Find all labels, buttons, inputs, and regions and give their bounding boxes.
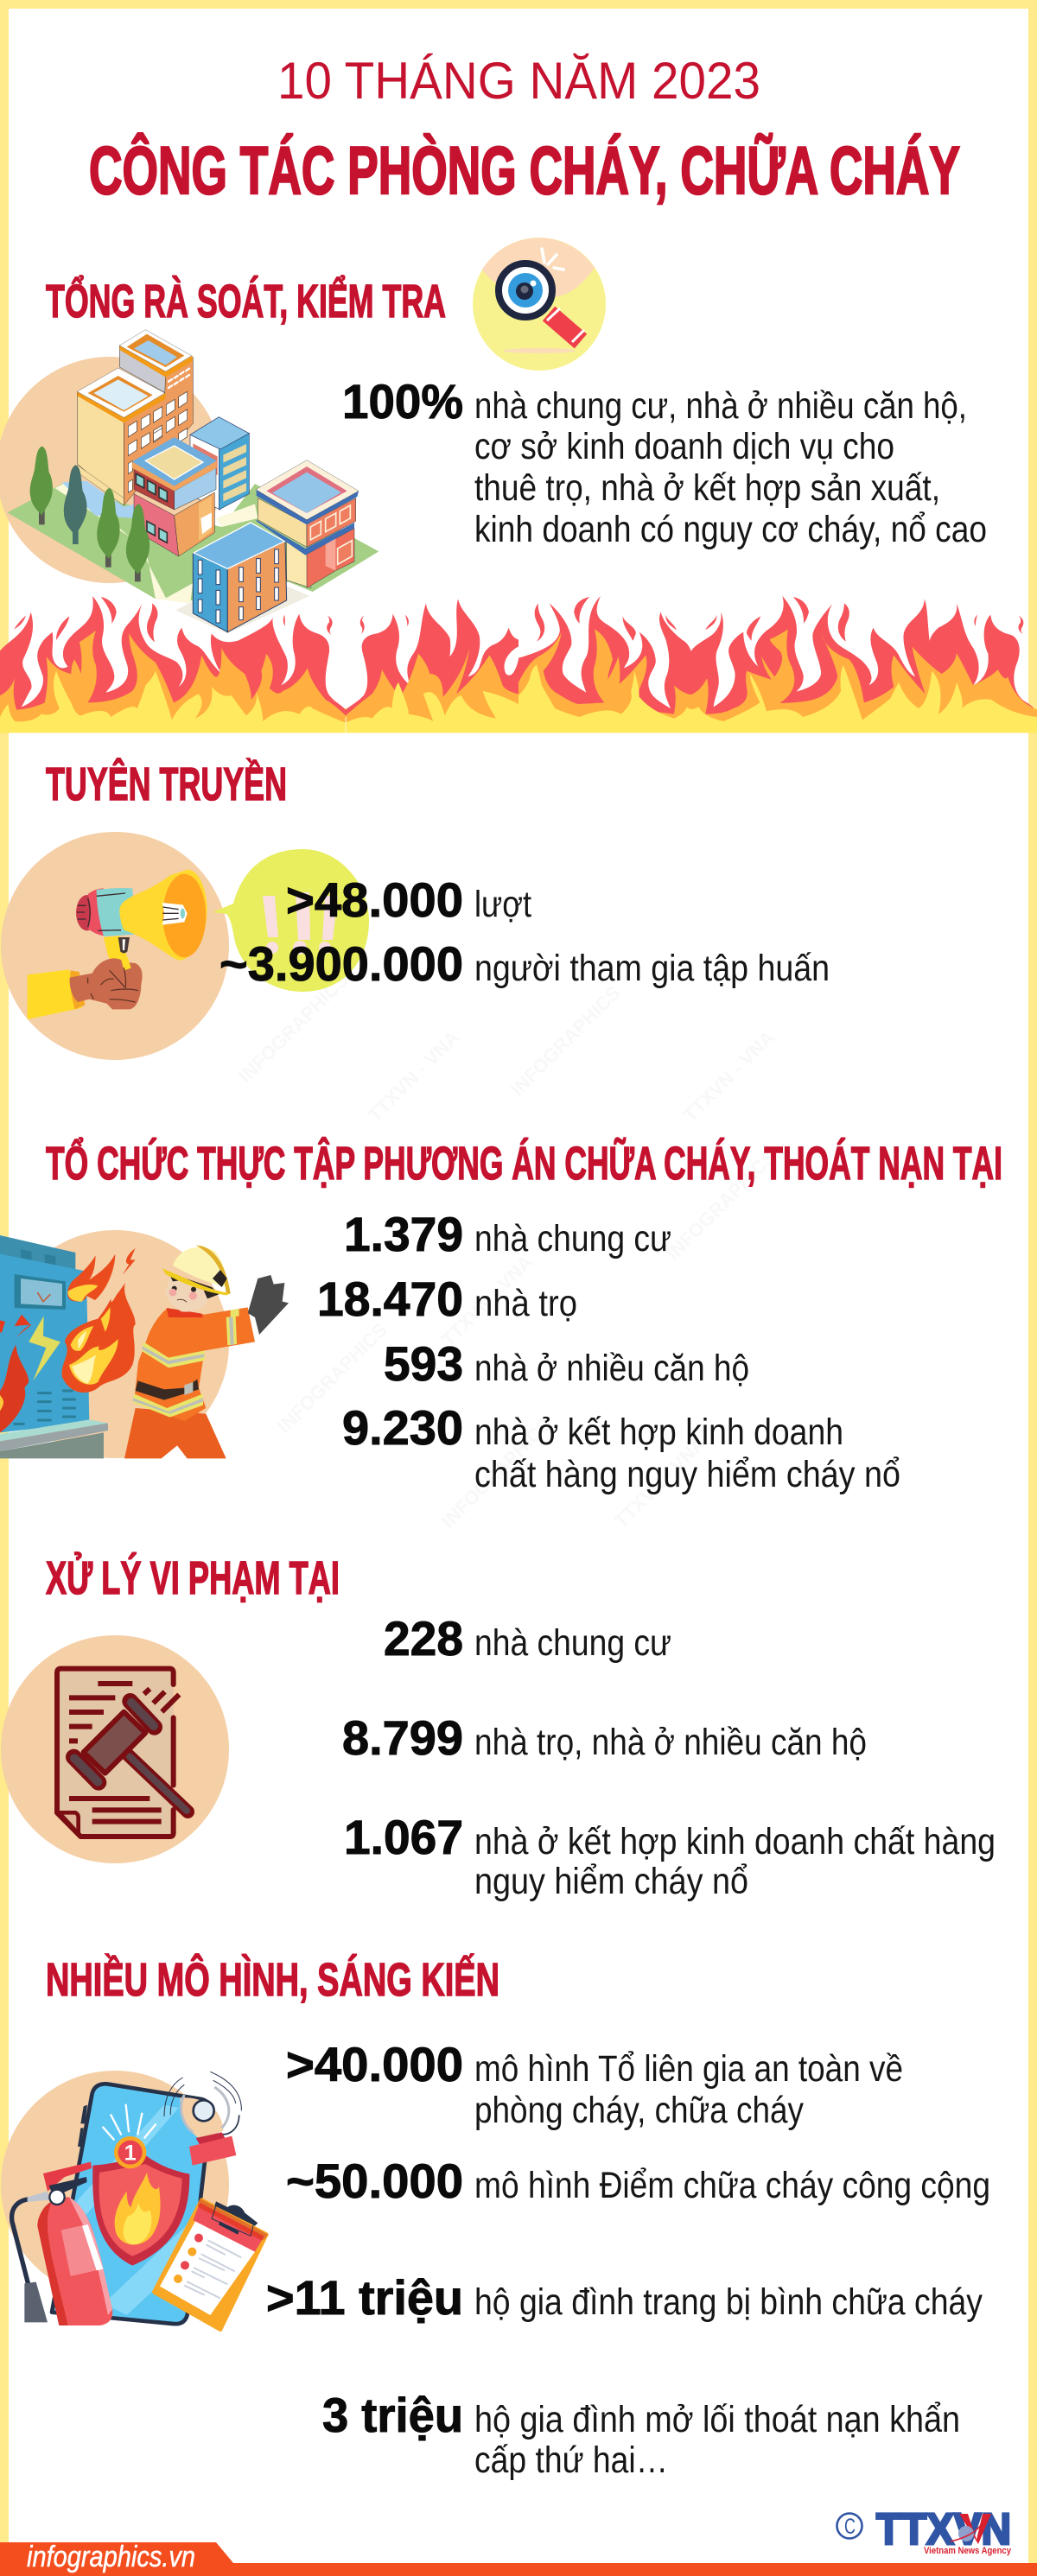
label: nhà chung cư [474,1218,671,1259]
number: >48.000 [286,872,463,927]
label: mô hình Tổ liên gia an toàn về [474,2048,903,2090]
text: INFOGRAPHICS [506,982,625,1101]
number: 1.379 [344,1207,463,1261]
text: INFOGRAPHICS [273,1319,391,1437]
stat: 100% [342,374,987,550]
description: nhà chung cư, nhà ở nhiều căn hộ, [474,385,967,427]
label: hộ gia đình mở lối thoát nạn khẩn [474,2399,960,2440]
clipboard [154,2200,266,2330]
title line 1: 10 THÁNG NĂM 2023 [277,52,760,110]
number: 8.799 [342,1710,463,1765]
stat: 11 triệu [266,2270,983,2325]
front building [193,553,227,632]
text: INFOGRAPHICS [234,969,353,1088]
stat: 18.470 [317,1272,577,1326]
stat: 3 triệu [322,2388,960,2481]
label [474,1412,900,1495]
TTXVN logo [837,2504,1012,2556]
label: chất hàng nguy hiểm cháy nổ [474,1454,900,1495]
label [474,2399,960,2481]
section heading: xử lý vi phạm tại: XỬ LÝ VI PHẠM TẠI [46,1552,340,1604]
description: cơ sở kinh doanh dịch vụ cho [474,426,894,467]
extinguisher [12,2199,30,2287]
alarm [164,2072,241,2135]
icon: megaphone [1,832,369,1060]
speech bubble [213,849,369,992]
trees [39,510,45,524]
description: thuê trọ, nhà ở kết hợp sản xuất, [474,467,940,509]
text: TTXVN - VNA [437,1251,537,1351]
tall building [119,346,166,393]
illustration: firefighter [0,1230,289,1458]
text: TTXVN - VNA [679,1026,779,1126]
label: nhà trọ, nhà ở nhiều căn hộ [474,1722,867,1763]
title [89,52,960,208]
illustration: phone, extinguisher and checklist [1,2071,268,2330]
label: người tham gia tập huấn [474,948,830,989]
badge: 1 [124,2141,137,2166]
stat: 50.000 [286,2154,990,2208]
wordmark: TTXVN [876,2504,1011,2554]
text: TTXVN - VNA [610,1432,709,1532]
number: 593 [384,1336,463,1391]
label: nguy hiểm cháy nổ [474,1861,748,1902]
label: lượt [474,884,531,925]
illustration: isometric buildings [0,330,379,633]
section heading: tuyên truyền: TUYÊN TRUYỀN [46,758,287,810]
flames left half [0,596,518,733]
stat: 9.230 [342,1400,900,1495]
section heading: tổng rà soát, kiểm tra: TỔNG RÀ SOÁT, KIỂM TRA [46,276,446,327]
flames right half [518,596,1037,733]
copyright mark [837,2514,862,2539]
number: 100% [342,374,463,428]
stat: 593 [384,1336,749,1391]
section heading: nhiều mô hình, sáng kiến: NHIỀU MÔ HÌNH, SÁNG KIẾN [46,1953,499,2006]
right building [287,542,311,588]
text: TTXVN - VNA [364,1026,463,1126]
number: ~50.000 [286,2154,463,2208]
description [474,385,987,550]
number: >11 triệu [266,2270,463,2325]
text: INFOGRAPHICS [437,1414,556,1532]
number: ~3.900.000 [219,936,463,991]
copyright mark: C [844,2515,856,2539]
stat: 228 [384,1611,671,1666]
stat: 8.799 [342,1710,867,1765]
label: nhà ở nhiều căn hộ [474,1348,749,1389]
helmet [173,1247,226,1287]
icon: gavel and document [1,1635,229,1863]
blue building [190,435,220,510]
stat: 3.900.000 người [219,936,830,991]
number: >40.000 [286,2037,463,2091]
label [474,1821,996,1902]
number: 3 triệu [322,2388,463,2442]
flames [62,1283,136,1393]
number: 18.470 [317,1272,463,1326]
label: nhà ở kết hợp kinh doanh [474,1412,843,1453]
number: 1.067 [344,1810,463,1864]
phone [52,2084,211,2324]
shield [92,2155,189,2266]
control panel [0,1235,75,1272]
stat: 40.000 [286,2037,903,2131]
stat: 48.000 lượt [286,872,531,927]
website: infographics.vn [27,2541,195,2573]
icon: magnifying glass [473,238,606,371]
label [474,2048,903,2131]
label: phòng cháy, chữa cháy [474,2090,804,2131]
number: 9.230 [342,1400,463,1455]
flame band [0,596,1037,733]
label: nhà trọ [474,1283,577,1324]
footer bar [0,2541,1037,2576]
stat: 1.067 [344,1810,996,1902]
firefighter body [124,1408,226,1458]
stat: 1.379 [344,1207,671,1261]
label: cấp thứ hai… [474,2440,668,2481]
text: INFOGRAPHICS [662,1146,780,1265]
number: 228 [384,1611,463,1666]
head [166,1276,212,1312]
badge [114,2136,146,2168]
label: nhà chung cư [474,1622,671,1664]
central building [134,494,179,556]
agency name: Vietnam News Agency [924,2546,1012,2556]
